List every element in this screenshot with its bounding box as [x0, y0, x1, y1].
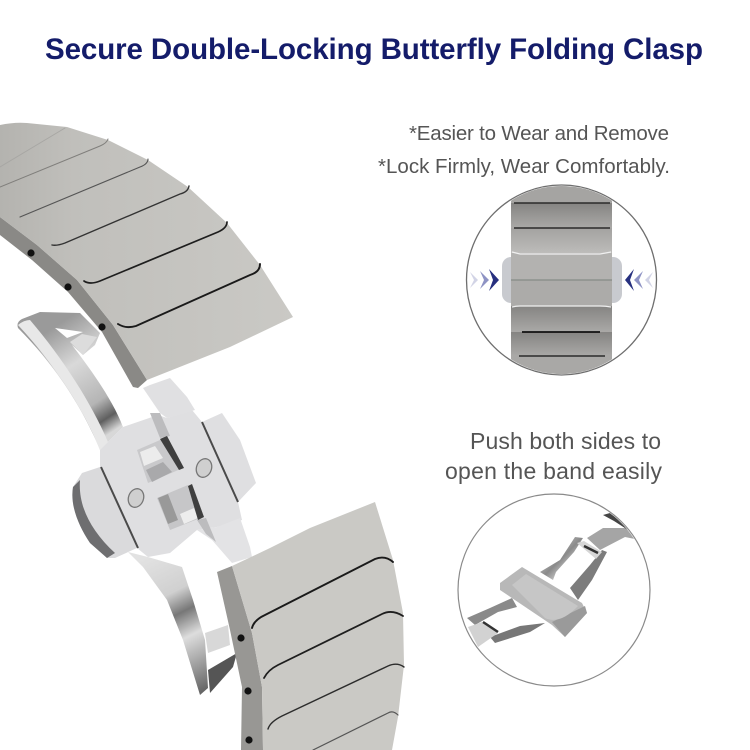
clasp body	[500, 567, 587, 637]
left arm of butterfly clasp, upper	[18, 312, 123, 450]
band side edge	[0, 217, 147, 388]
caption: push instruction	[445, 428, 662, 484]
detail circle: opened clasp	[458, 494, 650, 686]
clasp pin, right	[194, 457, 214, 479]
lower frame	[467, 598, 517, 625]
upper window with hinge	[137, 436, 184, 483]
lower window with hinge	[157, 484, 204, 530]
band side edge	[217, 566, 263, 750]
caption: push instruction: Push both sides to	[470, 428, 661, 454]
right push button	[202, 413, 256, 502]
upper frame	[540, 537, 583, 580]
arrows pointing inward, right	[625, 269, 653, 291]
caption: benefits	[378, 122, 670, 178]
upper metal band	[0, 123, 293, 388]
band pin holes	[27, 249, 35, 257]
upper connecting arm	[143, 378, 195, 418]
detail circle: pressing the clasp buttons	[466, 180, 656, 380]
lower metal band	[217, 502, 404, 750]
caption: benefits: *Easier to Wear and Remove	[409, 122, 669, 145]
band top face	[232, 502, 404, 750]
left push button	[72, 467, 138, 558]
lower connecting arm	[197, 518, 252, 563]
link gaps	[0, 128, 260, 327]
arrows pointing inward, left	[470, 269, 499, 291]
link gaps	[252, 558, 404, 750]
caption: push instruction: open the band easily	[445, 458, 662, 484]
caption: benefits: *Lock Firmly, Wear Comfortably.	[378, 155, 670, 178]
central clasp plate	[100, 378, 252, 563]
band top face	[0, 123, 293, 380]
left arm of butterfly clasp, lower	[128, 552, 237, 695]
title: Secure Double-Locking Butterfly Folding Clasp	[45, 33, 703, 66]
band pin holes	[237, 634, 245, 642]
clasp pin, left	[126, 487, 146, 509]
upper strap	[587, 528, 634, 550]
